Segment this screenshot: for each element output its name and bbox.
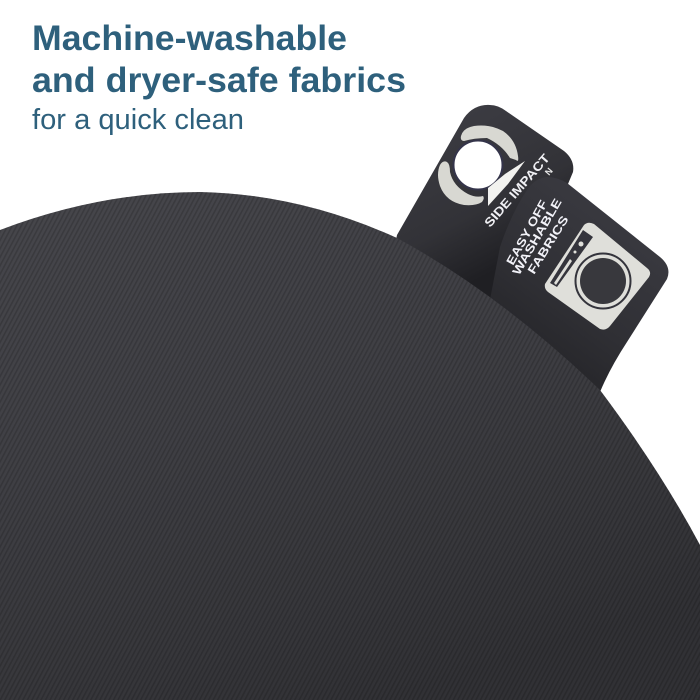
title line 2: and dryer-safe fabrics — [32, 61, 406, 100]
label: easy off washable fabrics: WASHABLE — [509, 196, 565, 278]
label: easy off washable fabrics — [503, 196, 572, 278]
title line 1: Machine-washable — [32, 19, 347, 58]
icon: side impact protection — [438, 126, 555, 230]
cushion — [0, 192, 700, 700]
label: side impact: SIDE IMPACT — [482, 151, 553, 230]
subtitle: for a quick clean — [32, 104, 244, 136]
icon: washing machine — [545, 223, 650, 330]
fabric texture — [0, 192, 700, 700]
front tag: washable fabrics — [489, 177, 668, 392]
label: easy off washable fabrics: FABRICS — [525, 213, 572, 277]
label: easy off washable fabrics: EASY OFF — [503, 198, 551, 267]
headline — [32, 19, 406, 136]
back tag: side impact — [395, 105, 573, 340]
label: protection fragment: N — [543, 166, 555, 177]
